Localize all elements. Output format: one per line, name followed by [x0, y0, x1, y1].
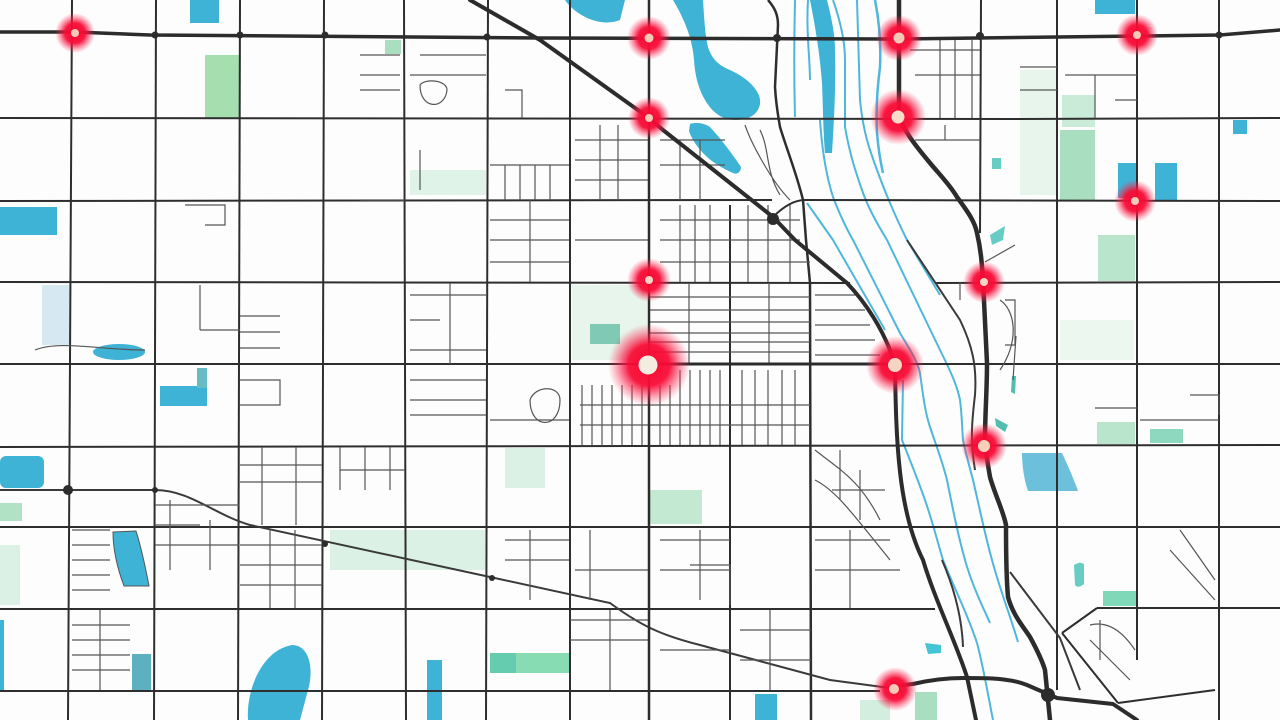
secondary roads	[0, 240, 1080, 690]
highway: southern connector	[895, 678, 1137, 720]
highway: east bypass	[899, 0, 1050, 720]
hotspot: 75,33	[55, 13, 95, 53]
hotspot: largest, 649,365	[608, 324, 690, 406]
hotspot: 1137,35	[1116, 14, 1158, 56]
hotspot: 899,38	[876, 15, 922, 61]
hotspot: 899,117	[870, 89, 926, 145]
hotspot: 649,280	[627, 258, 671, 302]
hotspot: 1135,201	[1114, 180, 1156, 222]
highway: north-west diagonal	[470, 0, 976, 720]
hotspot: 984,446	[961, 423, 1007, 469]
highway: top east-west	[0, 30, 1280, 39]
hotspot: 649,118	[628, 97, 670, 139]
hotspot: 895,689	[873, 667, 917, 711]
arterial: central east-west	[650, 362, 895, 366]
hotspot: 649,38	[627, 16, 671, 60]
hotspot: 984,282	[963, 261, 1005, 303]
hotspot: 895,365	[866, 336, 924, 394]
arterial: central north-south	[648, 0, 650, 720]
river channels	[794, 0, 1018, 720]
